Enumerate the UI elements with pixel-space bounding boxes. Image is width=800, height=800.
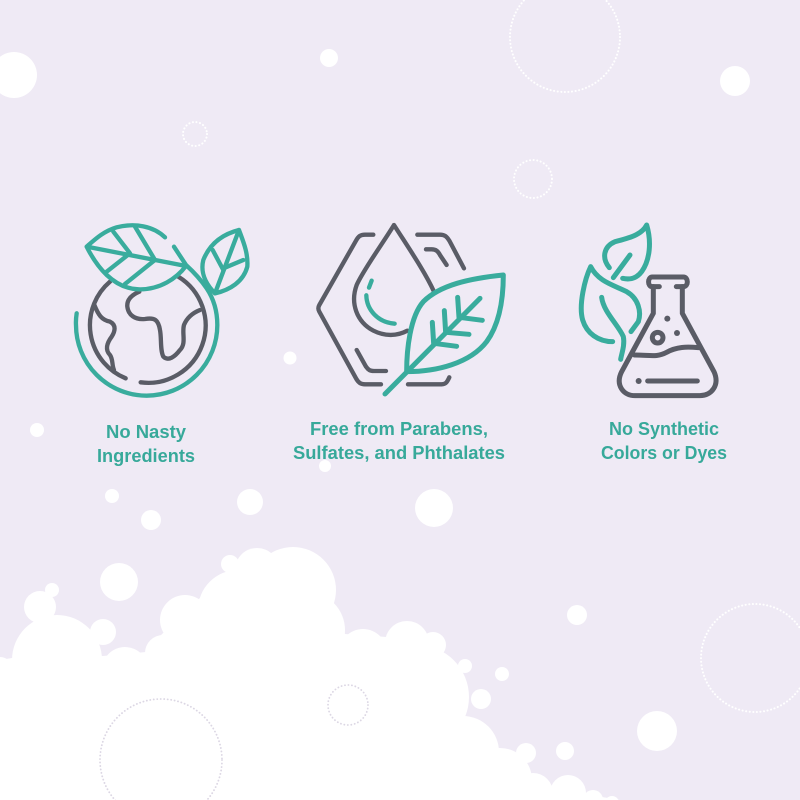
icon: earth with leaves <box>76 225 247 396</box>
heading: free from parabens: Free from Parabens, <box>310 419 488 439</box>
leaf <box>385 275 503 394</box>
leaves <box>581 225 649 359</box>
large leaf <box>87 225 186 289</box>
foam cloud <box>0 547 620 800</box>
flask <box>619 277 716 396</box>
globe outline <box>90 277 206 383</box>
icon: hexagon, drop and leaf <box>318 225 503 394</box>
water drop <box>354 225 434 335</box>
heading: no synthetic colors <box>601 419 727 463</box>
heading: no synthetic colors: No Synthetic <box>609 419 719 439</box>
green ring <box>76 247 217 396</box>
heading: no nasty ingredients: No Nasty <box>106 422 186 442</box>
heading: free from parabens <box>293 419 505 463</box>
drop highlight <box>366 281 395 324</box>
icon: flask with leaves <box>581 225 716 396</box>
flask dots <box>636 316 680 384</box>
dotted bubble outlines <box>183 0 800 712</box>
heading: no synthetic colors: Colors or Dyes <box>601 443 727 463</box>
heading: free from parabens: Sulfates, and Phthalates <box>293 443 505 463</box>
heading: no nasty ingredients: Ingredients <box>97 446 195 466</box>
hexagon segments <box>318 235 464 384</box>
heading: no nasty ingredients <box>97 422 195 466</box>
dotted outlines on foam <box>100 685 368 800</box>
small leaf <box>202 230 247 293</box>
